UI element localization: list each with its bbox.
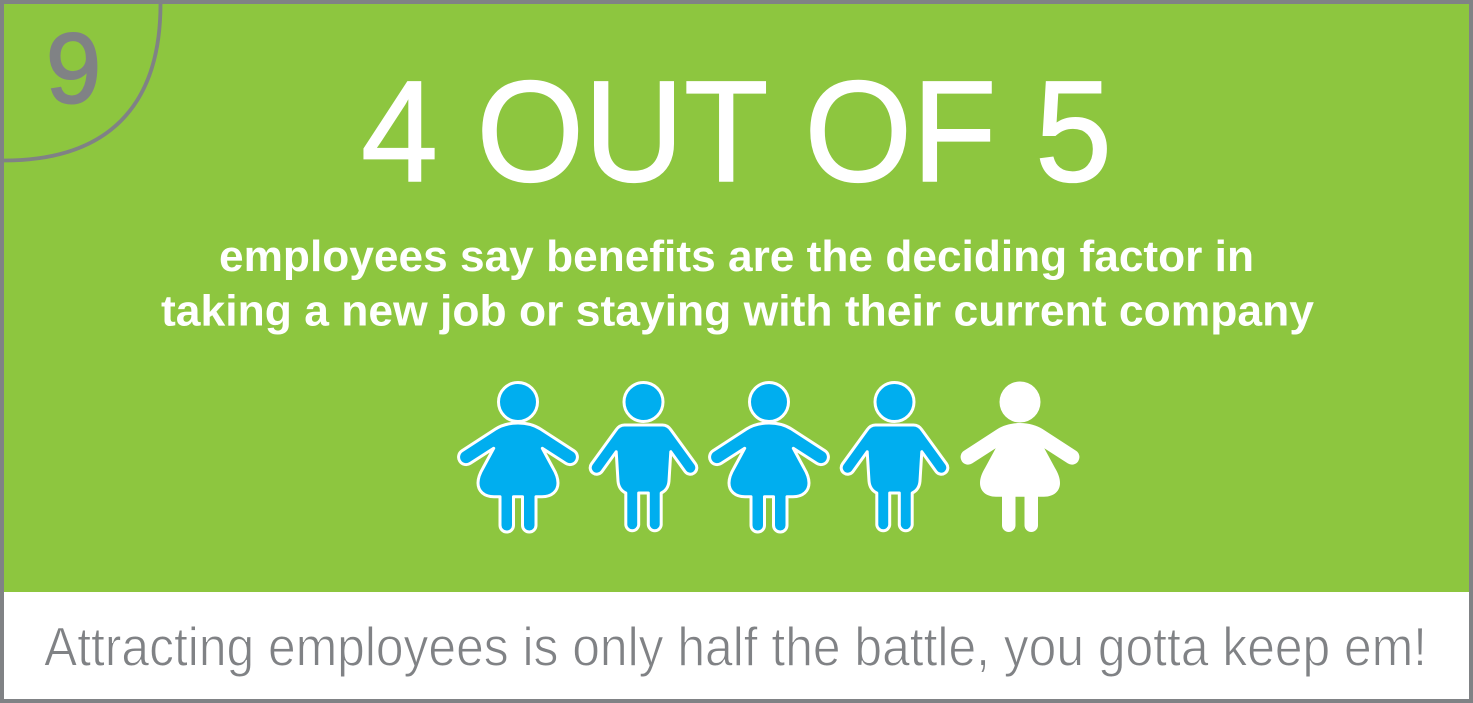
subtitle text block: taking a new job or staying with their current company	[161, 286, 1315, 336]
subtitle text block: employees say benefits are the deciding factor in	[219, 232, 1254, 281]
subtitle text block	[161, 232, 1315, 336]
panel: white footer band	[0, 592, 1473, 703]
icon: man 1 (blue)	[590, 382, 697, 531]
icon: woman 2 (blue)	[710, 382, 828, 532]
icon: woman 1 (blue)	[459, 382, 577, 532]
title: 4 OUT OF 5	[361, 51, 1112, 212]
icon: man 2 (blue)	[841, 382, 948, 531]
icon: woman 3 (white)	[961, 382, 1079, 532]
pictogram row: 4 of 5 highlighted	[459, 382, 1079, 532]
corner badge with number 9	[4, 4, 160, 160]
corner badge with number 9: 9	[46, 12, 101, 124]
